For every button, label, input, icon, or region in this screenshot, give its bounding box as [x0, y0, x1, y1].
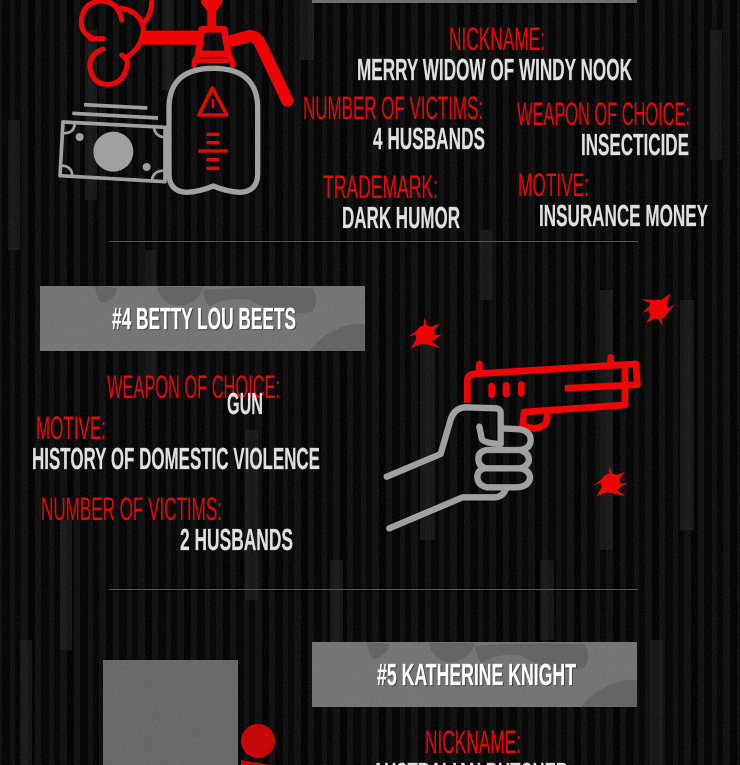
pistol [467, 357, 637, 428]
banner: #4 Betty Lou Beets [40, 286, 365, 351]
text block: motive [32, 410, 320, 476]
text block: motive [518, 167, 708, 233]
sprayer head [81, 0, 287, 101]
text block: motive: HISTORY OF DOMESTIC VIOLENCE [32, 441, 320, 476]
banner: #5 Katherine Knight [312, 642, 637, 707]
text block: number of victims: 2 HUSBANDS [180, 522, 293, 557]
photo placeholder: Katherine Knight [103, 660, 238, 765]
measuring marks [198, 134, 228, 168]
text block: motive: MOTIVE: [36, 410, 106, 446]
text block: number of victims [41, 491, 293, 557]
text block: weapon of choice [107, 369, 280, 421]
text block: nickname: NICKNAME: [449, 21, 545, 57]
text block: weapon of choice [517, 96, 690, 162]
text block: weapon of choice: WEAPON OF CHOICE: [107, 369, 280, 405]
text block: trademark [323, 169, 460, 235]
warning triangle [199, 88, 227, 115]
text block: nickname: NICKNAME: [425, 724, 521, 760]
bullet holes [408, 293, 678, 497]
banner: top (previous entry) [312, 0, 637, 3]
text block: nickname [372, 724, 568, 765]
icon: red circle and mark [241, 724, 275, 765]
banknote [60, 105, 165, 182]
text block: number of victims [303, 90, 485, 156]
text block: number of victims: NUMBER OF VICTIMS: [303, 90, 483, 126]
text block: motive: MOTIVE: [518, 167, 589, 203]
icon: poison sprayer and money [60, 0, 287, 192]
text block: trademark: DARK HUMOR [342, 200, 460, 235]
banner: #4 Betty Lou Beets: #4 BETTY LOU BEETS [112, 301, 296, 336]
text block: number of victims: 4 HUSBANDS [373, 121, 485, 156]
icon: hand holding gun with bullet holes [387, 293, 678, 528]
text block: weapon of choice: GUN [227, 386, 263, 421]
text block: number of victims: NUMBER OF VICTIMS: [41, 491, 222, 527]
banner: #5 Katherine Knight: #5 KATHERINE KNIGHT [377, 657, 576, 692]
text block: nickname [357, 21, 632, 87]
hand [387, 407, 531, 528]
text block: trademark: TRADEMARK: [323, 169, 438, 205]
bottle [169, 68, 258, 192]
